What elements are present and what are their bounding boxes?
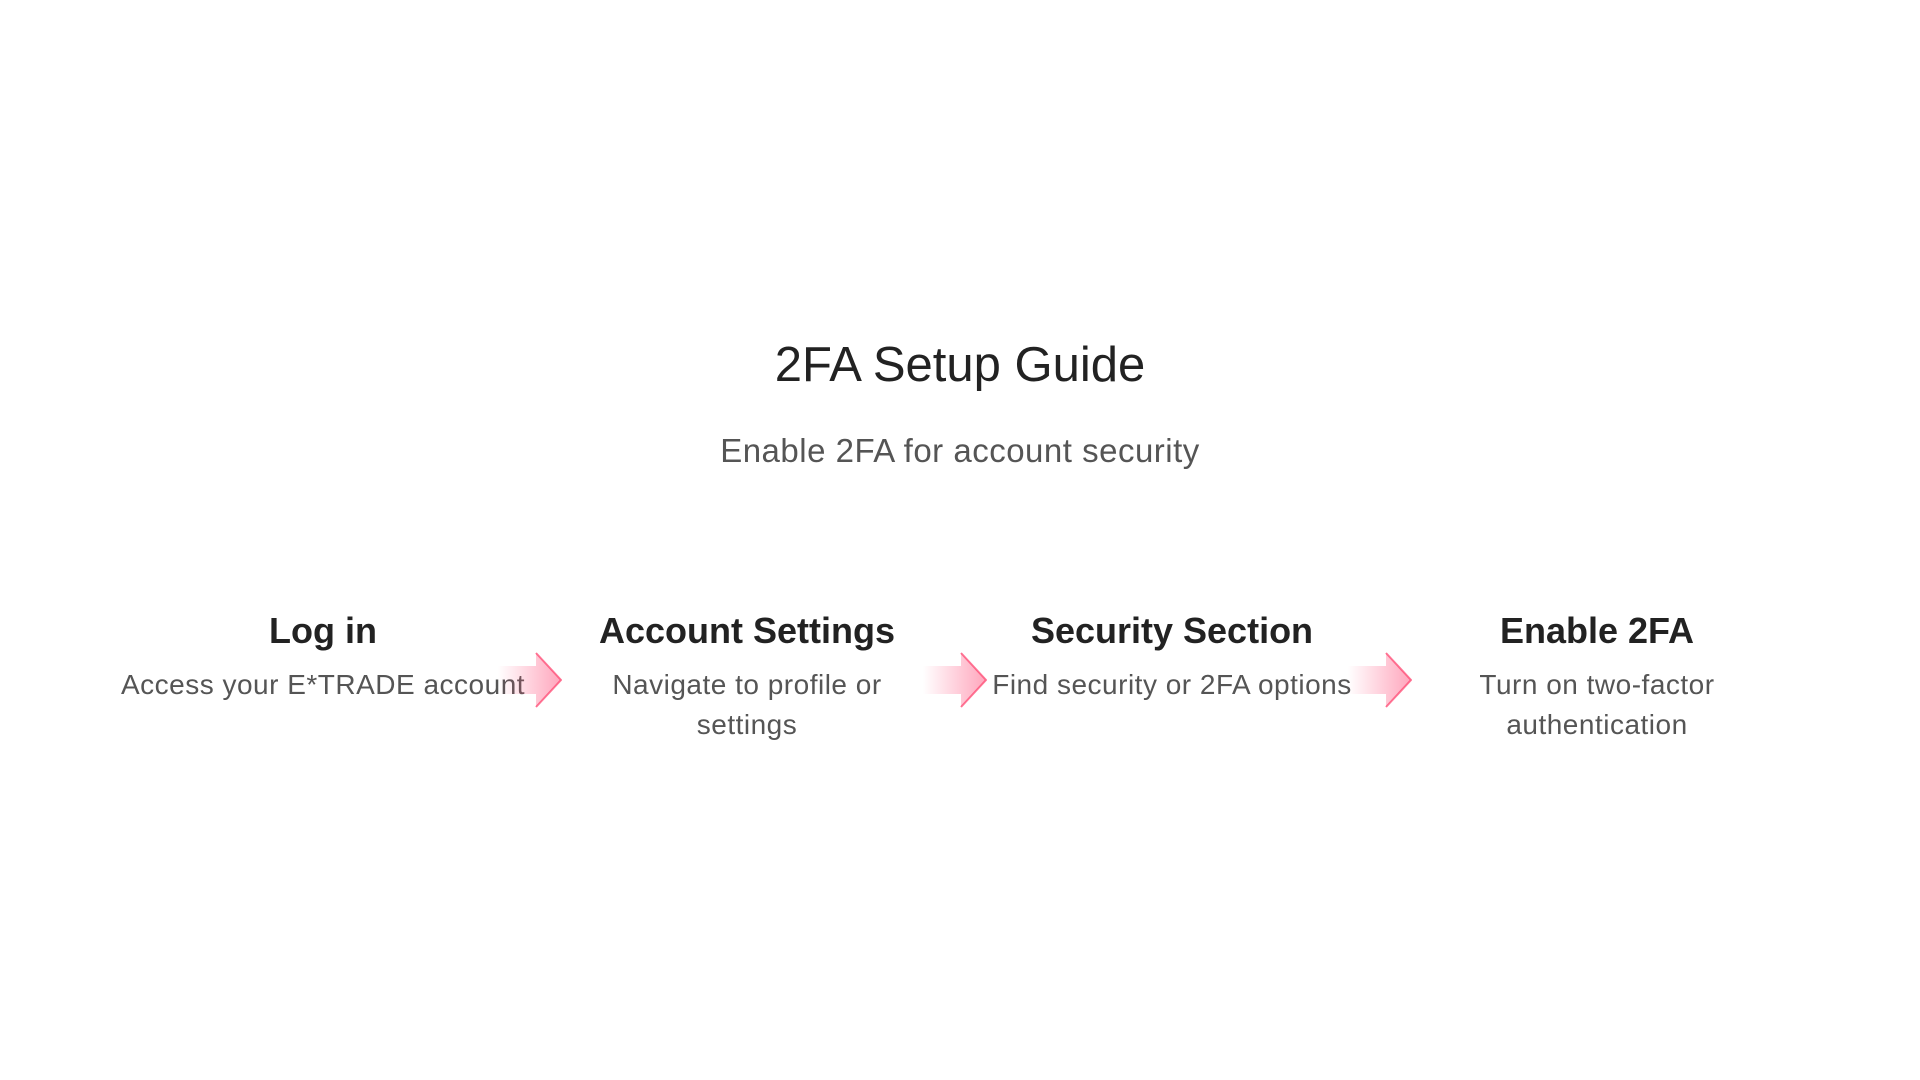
step: Security Section: Find security or 2FA options <box>992 669 1352 700</box>
subtitle: Enable 2FA for account security <box>720 432 1200 469</box>
step: Enable 2FA: Enable 2FA <box>1500 610 1694 651</box>
step: Enable 2FA <box>1479 610 1715 740</box>
step: Enable 2FA: Turn on two-factor <box>1479 669 1715 700</box>
step: Account Settings: Account Settings <box>599 610 895 651</box>
step: Log in: Access your E*TRADE account <box>121 669 525 700</box>
arrow 1 <box>504 652 562 708</box>
title: 2FA Setup Guide <box>775 338 1145 392</box>
step: Account Settings: Navigate to profile or <box>612 669 882 700</box>
step: Log in: Log in <box>269 610 377 651</box>
step: Security Section <box>992 610 1352 700</box>
step: Enable 2FA: authentication <box>1506 709 1688 740</box>
step: Security Section: Security Section <box>1031 610 1313 651</box>
step: Account Settings <box>599 610 895 740</box>
step: Log in <box>121 610 525 700</box>
arrow 2 <box>929 652 987 708</box>
step: Account Settings: settings <box>697 709 797 740</box>
arrow 3 <box>1354 652 1412 708</box>
